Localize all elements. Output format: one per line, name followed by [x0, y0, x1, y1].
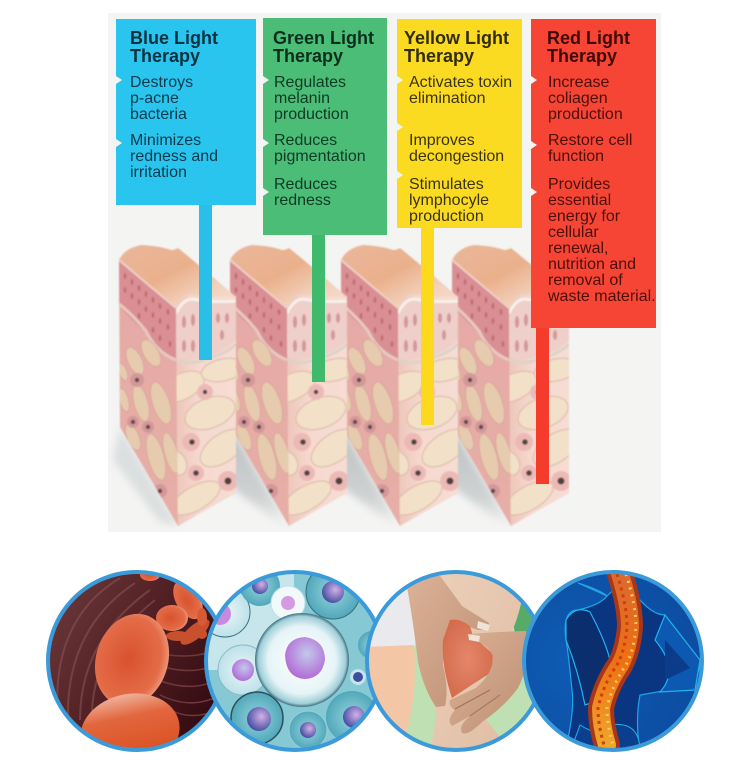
text: destroys bacteria: Destroys: [130, 74, 193, 91]
heading: yellow: Therapy: [404, 46, 474, 66]
blue connector bar: [199, 205, 212, 360]
circle: spine anatomy: [522, 570, 704, 752]
text: stimulates production: [409, 176, 489, 225]
text: increase collagen: Increase: [548, 74, 609, 91]
heading: yellow: Yellow Light: [404, 28, 509, 48]
text: reduces redness: Reduces: [274, 176, 337, 193]
text: provides essential energy: energy for: [548, 208, 620, 225]
background panel: [108, 13, 661, 532]
bullet marker: [531, 141, 537, 149]
text: provides essential energy: renewal,: [548, 240, 608, 257]
skin block 1: [116, 245, 252, 526]
text: increase collagen: [548, 74, 623, 123]
panel: red light therapy: [531, 19, 656, 484]
text: improves decongestion: Improves: [409, 132, 475, 149]
text: regulates melanin: [274, 74, 349, 123]
green box: [263, 18, 387, 235]
text: restore cell function: [548, 132, 632, 165]
text: minimizes redness: irritation: [130, 164, 187, 181]
heading: yellow: [404, 28, 509, 66]
skin cross-section illustrations: [112, 244, 570, 526]
text: activates toxin elimination: [409, 74, 512, 107]
text: reduces pigmentation: pigmentation: [274, 148, 366, 165]
heading: blue: Therapy: [130, 46, 200, 66]
green connector bar: [312, 235, 325, 382]
text: provides essential energy: waste material.: [548, 288, 656, 305]
text: improves decongestion: decongestion: [409, 148, 504, 165]
text: provides essential energy: removal of: [548, 272, 623, 289]
text: minimizes redness: redness and: [130, 148, 218, 165]
text: reduces pigmentation: Reduces: [274, 132, 337, 149]
bullet marker: [531, 76, 537, 84]
cast shadows under skin blocks: [113, 427, 511, 526]
text: destroys bacteria: [130, 74, 193, 123]
bullet marker: [263, 76, 269, 84]
bullet marker: [397, 171, 403, 179]
bullet marker: [116, 139, 122, 147]
bullet marker: [116, 76, 122, 84]
text: restore cell function: function: [548, 148, 604, 165]
text: reduces pigmentation: [274, 132, 366, 165]
panel: blue light therapy: [116, 19, 256, 360]
circle: red blood cells: [46, 570, 216, 752]
photo circles row: [46, 570, 704, 752]
text: minimizes redness: [130, 132, 218, 181]
yellow connector bar: [421, 228, 434, 425]
text: activates toxin elimination: elimination: [409, 90, 485, 107]
text: increase collagen: production: [548, 106, 623, 123]
skin block 3: [338, 245, 474, 526]
heading: green: [273, 28, 374, 66]
text: provides essential energy: nutrition and: [548, 256, 636, 273]
text: regulates melanin: Regulates: [274, 74, 346, 91]
skin block 2: [227, 245, 363, 526]
heading: blue: [130, 28, 218, 66]
text: destroys bacteria: bacteria: [130, 106, 187, 123]
text: improves decongestion: [409, 132, 504, 165]
text: regulates melanin: production: [274, 106, 349, 123]
text: reduces redness: [274, 176, 337, 209]
heading: green: Green Light: [273, 28, 374, 48]
red box: [531, 19, 656, 328]
text: increase collagen: coliagen: [548, 90, 608, 107]
text: minimizes redness: Minimizes: [130, 132, 201, 149]
text: activates toxin elimination: Activates toxin: [409, 74, 512, 91]
bullet marker: [397, 123, 403, 131]
yellow box: [397, 19, 522, 228]
text: stimulates production: lymphocyle: [409, 192, 489, 209]
bullet marker: [263, 188, 269, 196]
bullet marker: [263, 139, 269, 147]
text: provides essential energy: Provides: [548, 176, 610, 193]
text: provides essential energy: essential: [548, 192, 611, 209]
circle: skin cells: [204, 570, 376, 752]
panel: yellow light therapy: [397, 19, 522, 425]
panel: green light therapy: [263, 18, 387, 382]
circle: knee pain photo: [365, 570, 547, 752]
text: stimulates production: Stimulates: [409, 176, 484, 193]
text: provides essential energy: cellular: [548, 224, 599, 241]
heading: blue: Blue Light: [130, 28, 218, 48]
text: reduces redness: redness: [274, 192, 331, 209]
blue box: [116, 19, 256, 205]
text: destroys bacteria: p-acne: [130, 90, 179, 107]
text: provides essential energy: [548, 176, 656, 305]
heading: red: Therapy: [547, 46, 617, 66]
bullet marker: [531, 188, 537, 196]
text: restore cell function: Restore cell: [548, 132, 632, 149]
text: regulates melanin: melanin: [274, 90, 330, 107]
heading: red: [547, 28, 630, 66]
heading: red: Red Light: [547, 28, 630, 48]
bullet marker: [397, 76, 403, 84]
heading: green: Therapy: [273, 46, 343, 66]
skin block 4: [449, 245, 585, 526]
text: stimulates production: production: [409, 208, 484, 225]
red connector bar: [536, 328, 549, 484]
